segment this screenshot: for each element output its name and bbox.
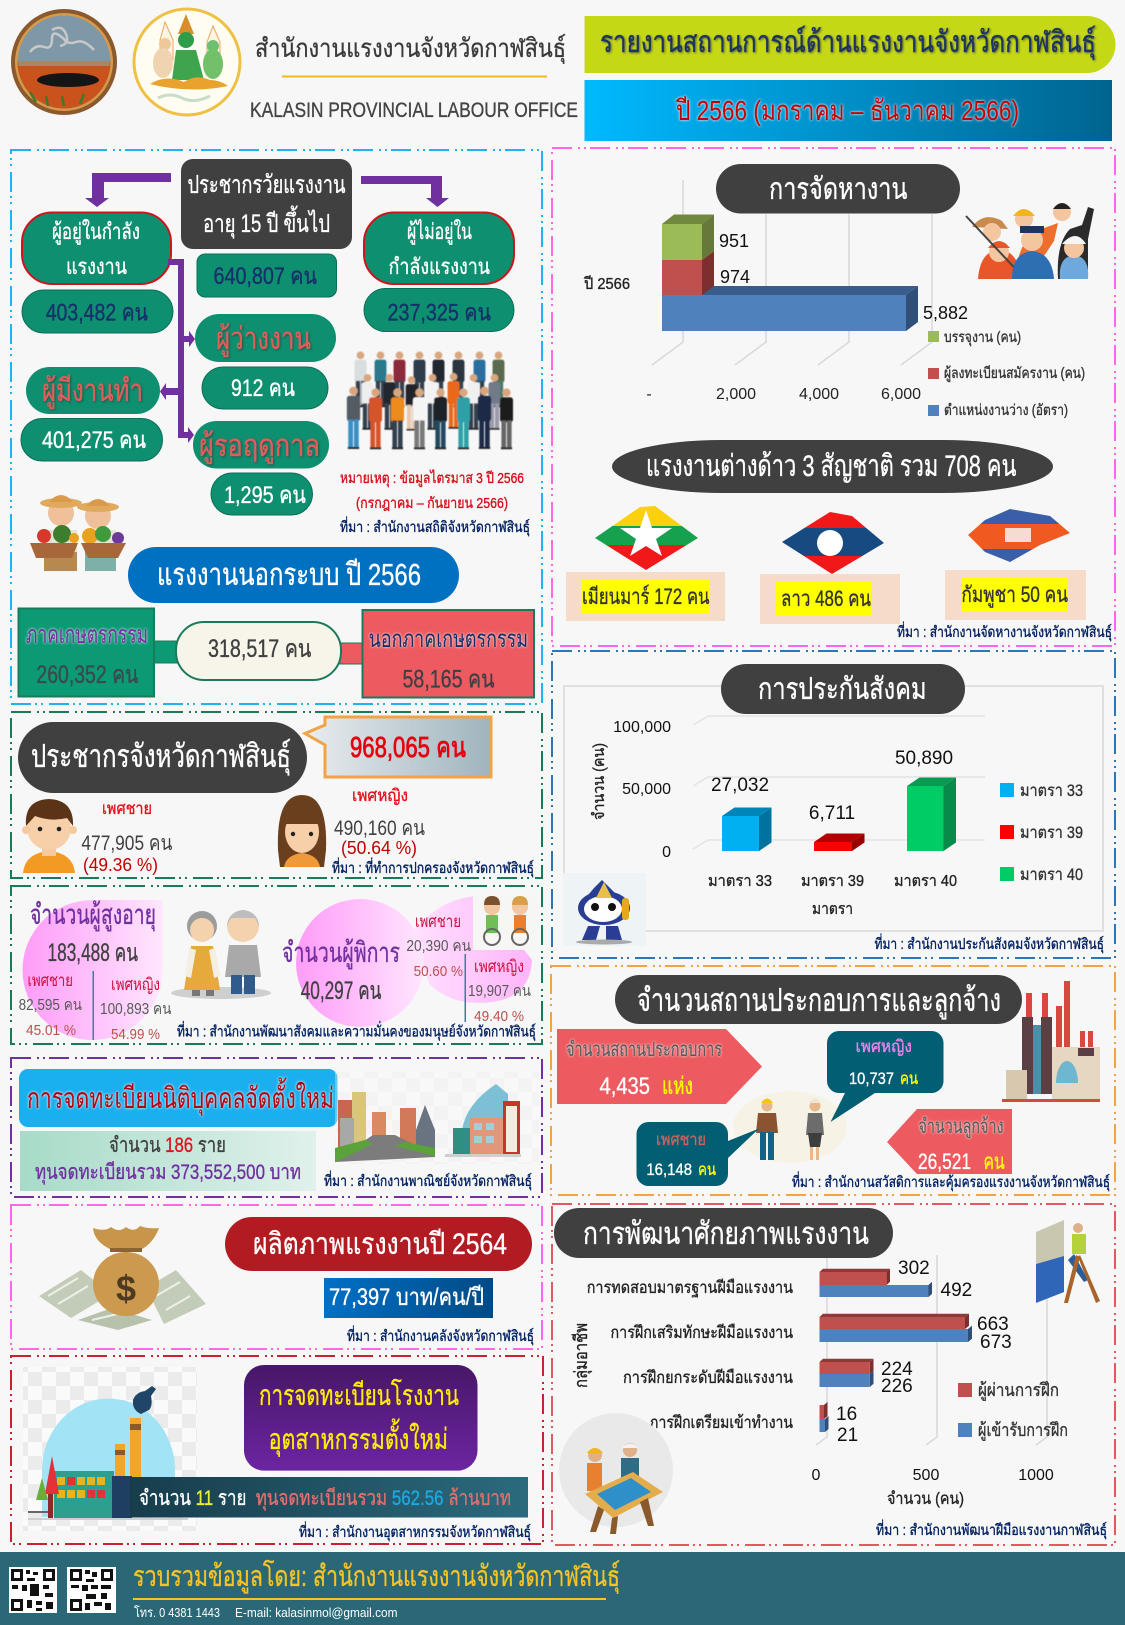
flag: Cambodia [968,509,1070,562]
value: not in labour force [364,288,514,332]
heading: working-age population: ประชากรวัยแรงงาน [188,171,346,199]
text: elderly male: 45.01 % [26,1022,76,1039]
label: seasonal workers: ผู้รอฤดูกาล [199,428,320,464]
box: registration figures: ทุนจดทะเบียนรวม 373,552,500 บาท [35,1161,301,1185]
footer [0,1552,1125,1625]
icon: children in wheelchairs [473,894,537,950]
value: labour force: 403,482 คน [46,300,148,326]
y axis labels [613,719,671,861]
header: provincial seal [11,9,117,115]
category labels: การฝึกเสริมทักษะฝีมือแรงงาน [610,1323,793,1342]
value: 5,882: 5,882 [923,303,968,323]
heading: foreign workers [612,440,1053,493]
legend: job placement: บรรจุงาน (คน) [944,329,1021,347]
icon: money bag and banknotes [39,1226,206,1330]
contact details: โทร. 0 4381 1443 [134,1605,220,1620]
x axis labels: มาตรา 40 [894,873,957,890]
heading: productivity [225,1217,532,1271]
heading: productivity: ผลิตภาพแรงงานปี 2564 [253,1228,507,1261]
arrow: to labour force [85,173,171,207]
text: disabled male: 20,390 คน [406,938,471,955]
category labels: การฝึกยกระดับฝีมือแรงงาน [623,1368,793,1387]
bars: skill enhancement [820,1314,972,1342]
heading: establishments [615,975,1022,1024]
value labels: 224 [881,1359,913,1380]
value labels: 50,890 [895,748,953,769]
heading: factory registration: อุตสาหกรรมตั้งใหม่ [269,1418,448,1457]
text: disabled male [406,912,471,980]
heading: working-age population: อายุ 15 ปี ขึ้นไป [203,205,330,239]
x axis labels: 500 [913,1467,939,1484]
connector bars [153,641,363,664]
QR code 1 [9,1567,57,1613]
panel: new juristic persons [11,1058,542,1197]
value: 951: 951 [719,231,749,251]
x axis labels: 0 [812,1467,821,1484]
callout: number of employees: 26,521 [918,1149,971,1174]
heading: juristic registration [19,1069,338,1127]
icon: girl [278,795,326,867]
box: agriculture: 260,352 คน [36,661,138,689]
callout: number of employees: คน [984,1149,1005,1174]
text: disabled female [468,957,531,1025]
footer title: รวบรวมข้อมูลโดย: สำนักงานแรงงานจังหวัดกาฬสินธุ์ [133,1559,620,1594]
box: Cambodia workers [945,570,1086,620]
heading: establishments: จำนวนสถานประกอบการและลูกจ้าง [637,982,1001,1020]
source: ที่มา : สำนักงานสถิติจังหวัดกาฬสินธุ์ [340,516,530,537]
value labels: 492 [940,1280,972,1301]
label: employed: ผู้มีงานทำ [42,373,143,409]
box: labour force: ผู้อยู่ในกำลัง [52,219,140,245]
flag: Myanmar [595,506,698,570]
source: ที่มา : สำนักงานอุตสาหกรรมจังหวัดกาฬสินธุ์ [299,1521,531,1542]
callout: male employees [636,1122,759,1186]
value: 974: 974 [720,267,750,287]
value: informal total [176,622,341,680]
callout: number of establishments [557,1029,762,1104]
source: ที่มา : สำนักงานพาณิชย์จังหวัดกาฬสินธุ์ [324,1170,532,1191]
bar: placed [662,214,714,260]
box: labour force: แรงงาน [66,254,127,279]
text: female population: 490,160 คน [334,817,425,840]
axis labels: 6,000 [881,386,921,403]
callout: female employees: เพศหญิง [856,1037,912,1056]
x axis labels: มาตรา 33 [708,873,772,890]
note: data period [340,469,524,512]
legend: job placement [928,329,1085,419]
text: elderly female [100,975,171,1043]
text: elderly male: 82,595 คน [19,997,82,1014]
label: unemployed [195,314,336,362]
connector: labour force breakdown [160,259,195,443]
text: elderly female: 100,893 คน [100,1001,171,1018]
icon: male and female workers [733,1091,847,1163]
icon: city street [335,1072,539,1164]
heading: population: ประชากรจังหวัดกาฬสินธุ์ [31,738,291,776]
text: disabled male: 50.60 % [414,963,463,980]
panel: job placement and foreign workers [552,148,1115,646]
axis labels [646,386,921,403]
bars: skill standard test [820,1269,932,1297]
source: ที่มา : สำนักงานคลังจังหวัดกาฬสินธุ์ [347,1325,534,1346]
legend: social security: มาตรา 40 [1020,865,1083,884]
box: Laos workers: ลาว 486 คน [781,586,871,611]
text: elderly male: เพศชาย [28,971,73,990]
icon: boy [22,799,77,873]
legend: job placement: ผู้ลงทะเบียนสมัครงาน (คน) [944,365,1085,382]
category label: ปี 2566 [584,275,630,293]
box: Myanmar workers: เมียนมาร์ 172 คน [582,584,710,609]
box: non-agriculture: 58,165 คน [402,666,494,694]
icon: group of workers [966,203,1094,279]
heading: social security [721,664,965,714]
category labels [587,1278,793,1432]
box: agriculture: ภาคเกษตรกรรม [26,621,148,649]
value: employed: 401,275 คน [42,427,146,454]
icon: social security mascot [563,873,646,946]
text: male population: เพศชาย [102,799,152,818]
legend: job placement: ตำแหน่งงานว่าง (อัตรา) [944,402,1068,419]
panel: social security [552,651,1115,958]
label: seasonal workers [193,421,329,468]
bar: applicants [662,251,714,295]
text: male population: 477,905 คน [81,832,172,855]
heading: juristic registration: การจดทะเบียนนิติบุคคลจัดตั้งใหม่ [27,1077,334,1116]
panel: elderly and disabled [11,886,542,1044]
axis labels: 2,000 [716,386,756,403]
panel: provincial population [11,712,542,878]
report title banner [584,16,1116,73]
category labels: การฝึกเตรียมเข้าทำงาน [650,1413,793,1432]
x axis labels: 1000 [1018,1467,1054,1484]
heading: job placement: การจัดหางาน [769,173,908,206]
box: Cambodia workers: กัมพูชา 50 คน [961,582,1068,608]
value: productivity [324,1278,493,1318]
box: non-agriculture: นอกภาคเกษตรกรรม [369,626,528,653]
header: office name in Thai: สำนักงานแรงงานจังหวัดกาฬสินธุ์ [255,33,566,64]
x axis labels [708,873,957,918]
heading: working-age population [181,159,352,249]
value labels [711,748,953,824]
icon: worker on ladder [1036,1220,1100,1303]
text: elderly female: เพศหญิง [111,975,160,994]
x axis labels [812,1467,1054,1484]
label: employed [26,367,160,414]
bar: section 33 [722,808,772,851]
icon: factory complex [1002,981,1100,1102]
text: male population: (49.36 %) [83,855,158,875]
value labels: 663 [977,1314,1009,1335]
report period banner [584,80,1112,141]
value: seasonal workers: 1,295 คน [224,482,306,509]
QR code 2 [67,1567,116,1613]
callout: male employees: เพศชาย [656,1130,706,1149]
panel: establishments and employees [551,966,1115,1195]
flag: Laos [782,512,884,574]
icon: factory illustration [23,1367,197,1531]
category labels: การทดสอบมาตรฐานฝีมือแรงงาน [587,1278,793,1298]
icon: farmers with baskets [30,495,126,571]
value labels: 302 [898,1258,930,1279]
value: seasonal workers [211,473,312,515]
heading: skill development [554,1208,893,1258]
axis labels: 4,000 [799,386,839,403]
legend: social security [1000,781,1083,884]
note: data period: (กรกฎาคม – กันยายน 2566) [356,495,508,512]
box: non-agriculture [362,610,534,698]
heading: disabled: จำนวนผู้พิการ [282,937,400,970]
bar: factory figures: จำนวน 11 ราย ทุนจดทะเบียนรวม 562.56 ล้านบาท [139,1487,511,1511]
chart: skill development [571,1255,1054,1508]
shape: disabled backdrop [296,896,532,1027]
value: disabled total: 40,297 คน [301,977,381,1005]
text: disabled female: 19,907 คน [468,983,531,1000]
chart: social security [591,716,985,918]
callout: number of establishments: แห่ง [662,1073,693,1100]
y axis title: กลุ่มอาชีพ [571,1323,592,1388]
contact details [134,1605,398,1620]
panel: skill development [552,1204,1115,1545]
x axis labels: มาตรา [812,901,853,918]
callout: number of employees: จำนวนลูกจ้าง [918,1116,1004,1139]
source: ที่มา : สำนักงานพัฒนาสังคมและความมั่นคงของมนุษย์จังหวัดกาฬสินธุ์ [177,1020,536,1042]
box: not in labour force: ผู้ไม่อยู่ใน [407,219,472,245]
text: male population [81,799,172,875]
value: working-age population: 640,807 คน [214,263,317,290]
value: unemployed [202,367,328,409]
box: registration figures: จำนวน 186 ราย [109,1134,226,1157]
text: elderly male [19,971,82,1039]
text: female population: เพศหญิง [352,786,408,805]
callout: male employees: 16,148 [646,1160,692,1179]
panel: labour force [11,150,542,704]
panel: new factories [11,1356,543,1544]
icon: engineers at plan table [559,1413,673,1534]
y axis labels: 100,000 [613,719,671,736]
value labels: 27,032 [711,775,769,796]
heading: factory registration: การจดทะเบียนโรงงาน [259,1378,459,1412]
text: disabled male: เพศชาย [415,912,461,931]
header: office name in English: KALASIN PROVINCIAL LABOUR OFFICE [250,99,578,122]
box: registration figures [20,1131,316,1191]
heading: skill development: การพัฒนาศักยภาพแรงงาน [583,1216,869,1251]
callout: number of establishments: จำนวนสถานประกอบการ [566,1039,722,1061]
text: disabled female: 49.40 % [474,1008,524,1025]
text: disabled female: เพศหญิง [474,957,524,976]
box: Myanmar workers [566,572,725,621]
callout: total population [305,717,491,777]
legend: skill development: ผู้เข้ารับการฝึก [978,1420,1068,1441]
box: labour force [22,212,171,284]
legend: social security: มาตรา 39 [1020,823,1083,842]
report period banner: ปี 2566 (มกราคม – ธันวาคม 2566) [675,95,1019,126]
callout: female employees: 10,737 [849,1069,894,1088]
bar: vacancies [662,286,918,331]
note: data period: หมายเหตุ : ข้อมูลไตรมาส 3 ปี 2566 [340,469,524,488]
heading: social security: การประกันสังคม [758,673,927,706]
bar: factory figures [130,1477,528,1518]
icon: crowd of workers [347,352,513,449]
legend: skill development [958,1380,1068,1441]
legend: social security: มาตรา 33 [1020,781,1083,800]
value labels [836,1258,1012,1446]
value: unemployed: 912 คน [231,375,295,402]
header: labour ministry seal [134,9,240,115]
chart: job placement [584,180,968,403]
label: unemployed: ผู้ว่างงาน [216,321,311,357]
bar: section 39 [814,834,864,851]
value: working-age population [197,254,336,297]
callout: number of establishments: 4,435 [600,1073,650,1100]
box: Laos workers [760,574,900,624]
arrow: to non labour force [361,176,449,207]
value: labour force [22,290,173,333]
callout: female employees [827,1031,944,1122]
legend: skill development: ผู้ผ่านการฝึก [978,1380,1059,1401]
heading: elderly: จำนวนผู้สูงอายุ [30,899,156,932]
x axis title: จำนวน (คน) [887,1489,964,1508]
source: ที่มา : ที่ทำการปกครองจังหวัดกาฬสินธุ์ [332,857,534,878]
value labels: 673 [980,1332,1012,1353]
box: not in labour force: กำลังแรงงาน [388,254,490,279]
bars: skill upgrading [820,1359,874,1387]
shape: elderly backdrop [22,900,162,1040]
callout: number of employees [887,1109,1012,1174]
heading: informal labour [128,547,459,603]
callout: total population: 968,065 คน [350,732,466,764]
y axis labels: 50,000 [622,781,671,798]
callout: female employees: คน [900,1069,918,1088]
x axis labels: มาตรา 39 [801,873,864,890]
heading: informal labour: แรงงานนอกระบบ ปี 2566 [157,557,421,592]
value labels: 6,711 [809,803,855,824]
icon: elderly couple [171,910,271,999]
text: elderly female: 54.99 % [111,1026,160,1043]
box: not in labour force [364,212,514,284]
text: female population [334,786,425,858]
y axis labels: 0 [662,844,671,861]
panel: labour productivity [11,1205,542,1349]
callout: male employees: คน [698,1160,716,1179]
value: not in labour force: 237,325 คน [388,300,491,326]
text: female population: (50.64 %) [341,838,417,858]
heading: population [18,722,307,793]
heading: job placement [716,164,960,214]
box: agriculture [18,608,154,696]
value labels: 21 [837,1425,858,1446]
contact details: E-mail: kalasinmol@gmail.com [235,1605,398,1620]
value: employed [21,418,162,461]
axis labels: - [646,386,652,403]
bar: section 40 [907,778,956,851]
icon: office building [445,1084,521,1157]
value: informal total: 318,517 คน [208,635,311,663]
heading: factory registration [244,1365,478,1471]
value labels: 16 [836,1404,857,1425]
icon: money bag and banknotes: $ [116,1268,136,1309]
value: elderly total: 183,488 คน [48,939,138,967]
value labels: 226 [881,1376,913,1397]
y axis title: จำนวน (คน) [591,743,608,820]
value: productivity: 77,397 บาท/คน/ปี [329,1284,484,1311]
bars: pre-employment training [820,1402,828,1432]
